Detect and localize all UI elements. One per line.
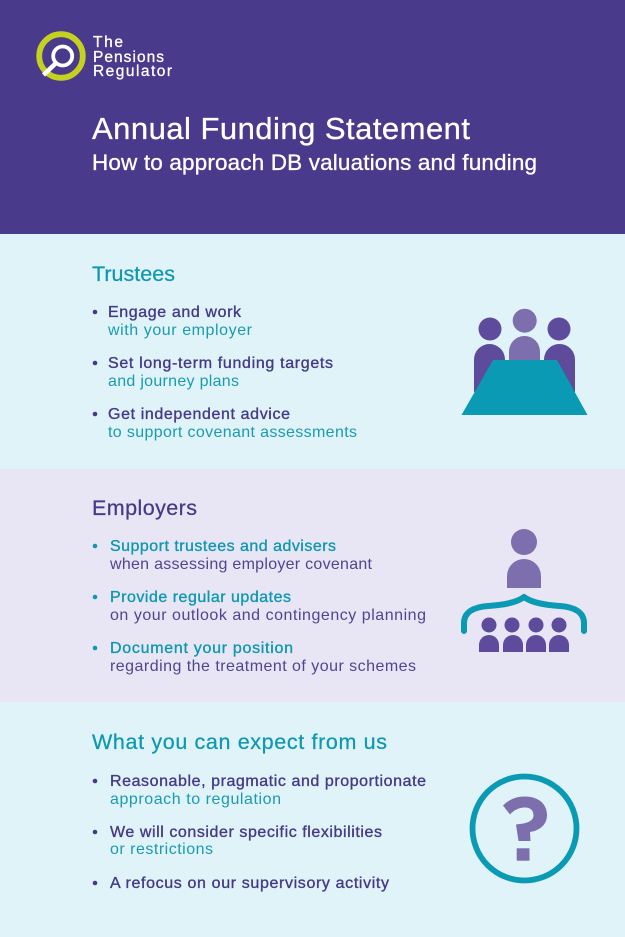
bullet: support trustees and advisers: Support trustees and advisers (110, 538, 336, 555)
bullet: specific flexibilities (93, 824, 382, 858)
bullet: specific flexibilities: We will consider specific flexibilities (110, 824, 382, 841)
bullet: get independent advice: Get independent advice (108, 406, 290, 423)
bullet: document your position: Document your position (110, 640, 293, 657)
bullet: set long-term funding targets: and journey plans (108, 373, 239, 390)
logo wordmark: The (93, 34, 123, 51)
bullet: set long-term funding targets: Set long-term funding targets (108, 355, 333, 372)
logo wordmark: Regulator (93, 63, 172, 80)
heading: trustees: Trustees (92, 262, 175, 286)
bullet: provide regular updates: on your outlook and contingency planning (110, 607, 426, 624)
panel: trustees (0, 234, 625, 469)
icon: leader above a group (464, 529, 584, 652)
bullet: document your position (93, 640, 416, 675)
bullet: set long-term funding targets (93, 355, 333, 390)
bullet: engage and work: Engage and work (108, 304, 242, 321)
panel: header (0, 0, 625, 234)
bullet: support trustees and advisers (93, 538, 373, 573)
bullet: get independent advice (93, 406, 357, 441)
bullet: document your position: regarding the treatment of your schemes (110, 658, 416, 675)
icon: pensions regulator logo (39, 34, 83, 78)
subtitle: How to approach DB valuations and funding (92, 150, 537, 175)
bullet: provide regular updates: Provide regular updates (110, 589, 291, 606)
bullet: reasonable approach: approach to regulation (110, 791, 281, 808)
logo wordmark: Pensions (93, 49, 164, 66)
bullet: support trustees and advisers: when assessing employer covenant (109, 556, 373, 573)
panel: employers (0, 469, 625, 702)
bullet: provide regular updates (93, 589, 426, 624)
icon: people around a table (462, 309, 588, 415)
bullet: specific flexibilities: or restrictions (110, 841, 213, 858)
bullet: engage and work (93, 304, 253, 339)
bullet: reasonable approach (93, 773, 426, 808)
heading: what you can expect from us: What you can expect from us (92, 730, 387, 754)
logo wordmark (93, 34, 172, 80)
title: Annual Funding Statement (92, 111, 470, 146)
bullet: engage and work: with your employer (107, 322, 253, 339)
icon: question mark in circle (472, 776, 576, 880)
panel: what you can expect from us (0, 702, 625, 937)
bullet: get independent advice: to support covenant assessments (108, 424, 357, 441)
bullet: supervisory activity: A refocus on our supervisory activity (110, 875, 389, 892)
bullet: reasonable approach: Reasonable, pragmatic and proportionate (110, 773, 426, 790)
heading: employers: Employers (92, 496, 197, 520)
